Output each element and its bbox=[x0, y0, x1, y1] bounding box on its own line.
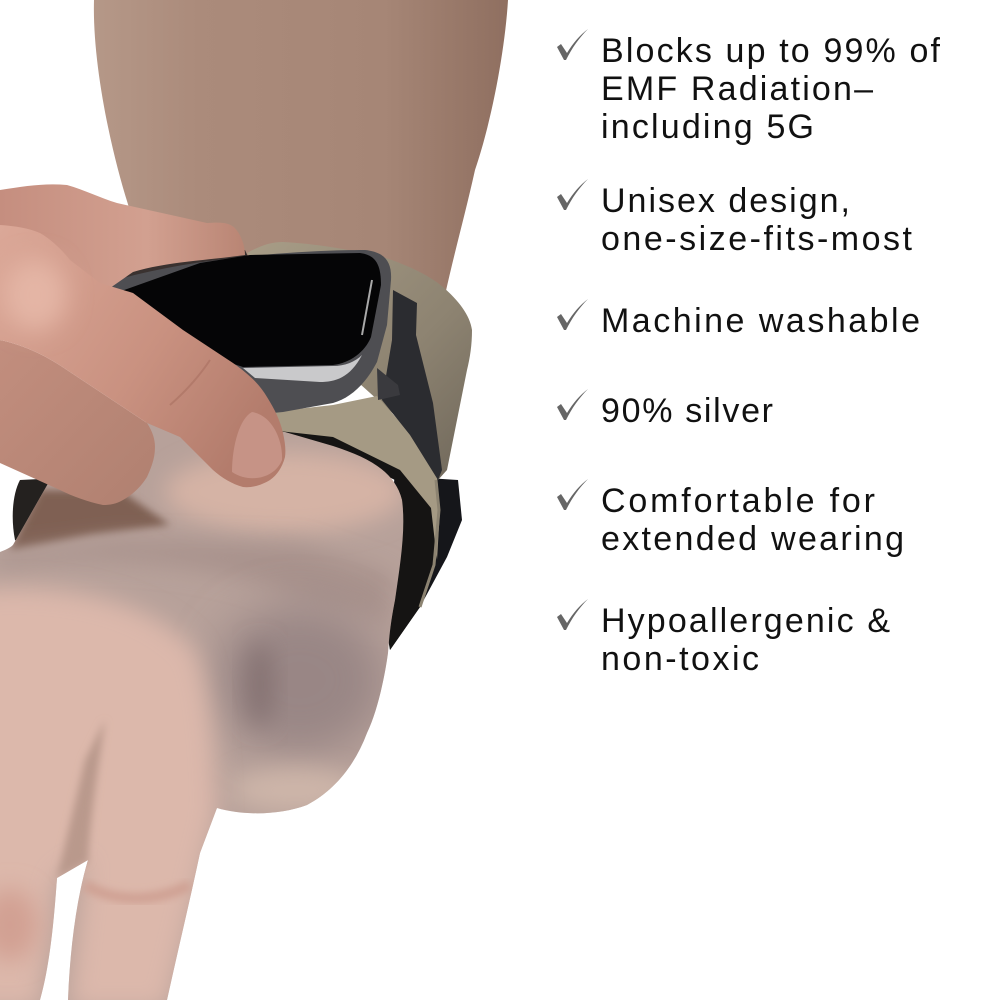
lower finger bbox=[0, 340, 155, 505]
icon: check bbox=[557, 29, 588, 60]
black outer band, right side bbox=[385, 470, 462, 650]
shield sleeve bbox=[247, 242, 472, 650]
knuckle crease bbox=[85, 885, 190, 898]
item: comfortable: Comfortable for bbox=[601, 482, 875, 520]
watch screen bbox=[110, 253, 381, 367]
sleeve black hem bbox=[270, 425, 436, 650]
screen glare bbox=[362, 280, 372, 335]
item: blocks EMF: including 5G bbox=[601, 108, 814, 146]
knuckle and fingers pink bbox=[0, 588, 217, 1000]
photo: hand and wrist wearing shielded watch band bbox=[0, 0, 508, 1000]
item: unisex bbox=[557, 179, 913, 258]
item: blocks EMF: Blocks up to 99% of bbox=[601, 32, 941, 70]
shadow under top finger bbox=[105, 250, 255, 305]
item: blocks EMF bbox=[557, 29, 941, 146]
icon: check bbox=[557, 479, 588, 510]
thumb bbox=[0, 225, 285, 487]
feature list bbox=[557, 29, 941, 678]
icon: check bbox=[557, 299, 588, 330]
left finger knuckle blush bbox=[0, 889, 38, 961]
sleeve lower bbox=[270, 396, 440, 560]
item: comfortable bbox=[557, 479, 904, 558]
wrist dark crease bbox=[10, 490, 170, 550]
watch strap bbox=[382, 290, 442, 480]
sleeve upper bbox=[247, 242, 472, 480]
finger gap shadow bbox=[57, 720, 105, 878]
item: unisex: Unisex design, bbox=[601, 182, 850, 220]
thumb crease bbox=[170, 360, 210, 405]
wrist warm tone bbox=[165, 452, 405, 532]
thumbnail bbox=[232, 412, 282, 478]
icon: check bbox=[557, 179, 588, 210]
icon: check bbox=[557, 389, 588, 420]
top finger bbox=[0, 184, 245, 295]
item: washable: Machine washable bbox=[601, 302, 920, 340]
purple shadow bbox=[215, 605, 385, 755]
item: silver: 90% silver bbox=[601, 392, 773, 430]
dark dimple bbox=[246, 643, 274, 727]
heel tone bbox=[230, 768, 360, 812]
gray tendon band bbox=[0, 540, 392, 625]
watch case bbox=[100, 250, 391, 420]
hand and fingers back bbox=[0, 420, 420, 1000]
hand base tone bbox=[0, 420, 420, 1000]
watch lug bbox=[377, 368, 400, 400]
watch case lower highlight bbox=[243, 355, 362, 382]
item: blocks EMF: EMF Radiation– bbox=[601, 70, 873, 108]
item: comfortable: extended wearing bbox=[601, 520, 904, 558]
item: unisex: one-size-fits-most bbox=[601, 220, 913, 258]
rear band, left side bbox=[13, 478, 60, 545]
item: hypoallergenic: Hypoallergenic & bbox=[601, 602, 890, 640]
forearm bbox=[94, 0, 508, 300]
watch bbox=[100, 250, 400, 420]
item: hypoallergenic bbox=[557, 599, 890, 678]
icon: check bbox=[557, 599, 588, 630]
sleeve stitch stripe bbox=[420, 480, 439, 607]
item: hypoallergenic: non-toxic bbox=[601, 640, 759, 678]
thumb knuckle highlight bbox=[3, 259, 67, 331]
